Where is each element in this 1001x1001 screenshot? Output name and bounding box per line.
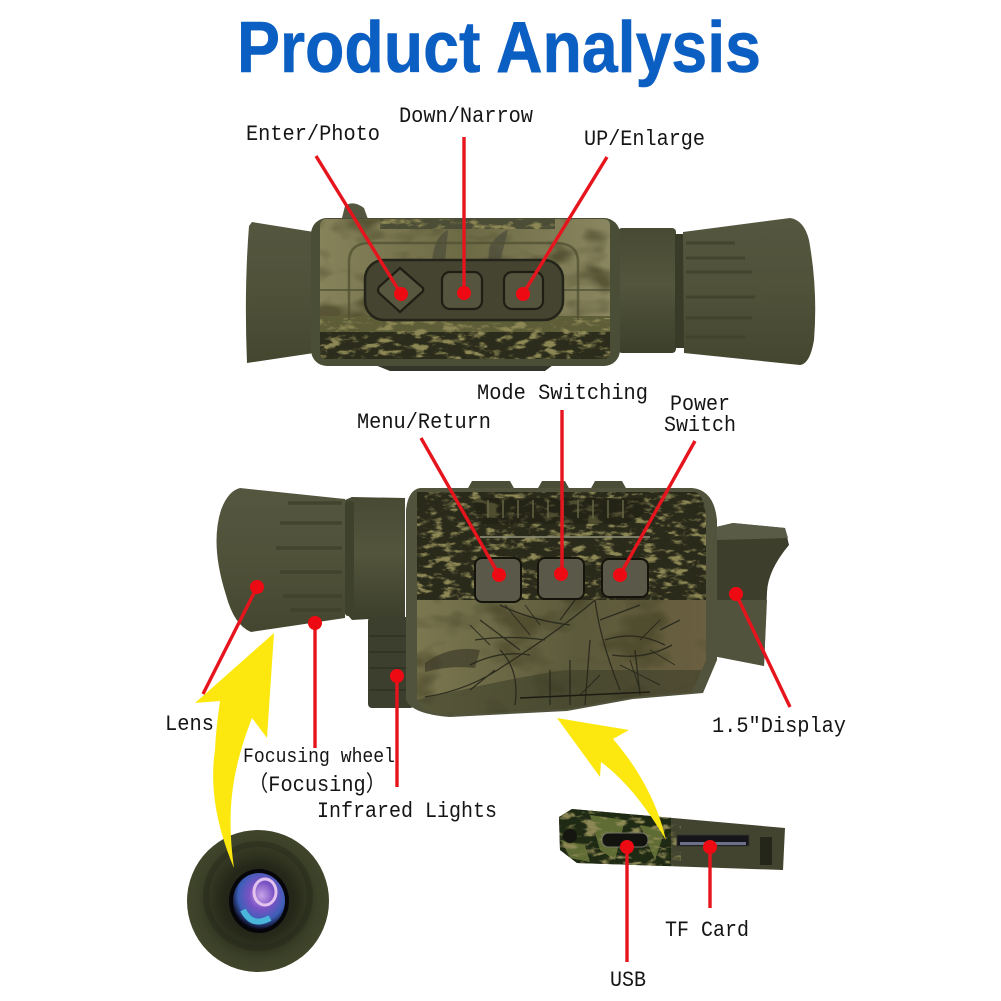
lower tree camo bbox=[417, 600, 707, 718]
mode button bbox=[538, 558, 584, 599]
label: Focusing wheel: Focusing wheel bbox=[243, 746, 395, 769]
eyecup bbox=[187, 830, 329, 972]
focus ring bbox=[618, 228, 676, 353]
label: USB: USB bbox=[610, 968, 646, 993]
label: (Focusing): （Focusing） bbox=[248, 773, 386, 798]
body shell bbox=[406, 488, 717, 717]
label: TF Card: TF Card bbox=[665, 918, 749, 943]
lens ring bbox=[229, 869, 289, 933]
strap lug bbox=[341, 203, 369, 222]
button: enter diamond bbox=[378, 268, 423, 312]
label: Infrared Lights: Infrared Lights bbox=[317, 799, 497, 824]
device: side view monocular bbox=[217, 481, 789, 720]
label: Power Switch: Power bbox=[670, 392, 730, 417]
card slot bbox=[677, 835, 749, 846]
device: front lens view bbox=[187, 830, 329, 972]
highlight stripe bbox=[480, 536, 650, 538]
infrared light housing bbox=[368, 617, 414, 708]
label: Lens: Lens bbox=[165, 712, 214, 737]
objective cup bbox=[683, 218, 815, 365]
lower bark camo bbox=[320, 316, 610, 332]
label: UP/Enlarge: UP/Enlarge bbox=[584, 127, 705, 152]
yellow arrow: ports bbox=[557, 718, 666, 840]
label: 1.5" Display: 1.5"Display bbox=[712, 714, 846, 739]
body shell bbox=[311, 218, 620, 366]
side slot bbox=[760, 837, 772, 865]
button: up bbox=[504, 272, 543, 309]
label: Enter/Photo: Enter/Photo bbox=[246, 122, 380, 147]
bottom slit bbox=[520, 692, 650, 698]
button panel bbox=[365, 260, 563, 320]
top ridge texture bbox=[380, 219, 555, 229]
title: Product Analysis bbox=[237, 8, 761, 88]
callout dots bbox=[250, 286, 743, 854]
grip bumps bbox=[467, 481, 627, 490]
recessed panel outline bbox=[349, 243, 578, 320]
objective cup bbox=[217, 488, 345, 632]
label: Menu/Return: Menu/Return bbox=[357, 410, 491, 435]
menu button bbox=[475, 558, 521, 602]
device: bottom port view bbox=[556, 806, 785, 870]
button: down bbox=[442, 272, 482, 309]
label: Down/Narrow: Down/Narrow bbox=[399, 104, 533, 129]
label: Mode Switching: Mode Switching bbox=[477, 381, 648, 406]
upper bark camo bbox=[417, 490, 707, 601]
upper camo bbox=[320, 219, 610, 319]
callout lines bbox=[203, 137, 790, 962]
display hood bbox=[713, 523, 789, 666]
bottom grip bbox=[375, 352, 553, 371]
yellow arrow: lens bbox=[195, 633, 274, 868]
focus ring bbox=[345, 497, 405, 620]
device: top view monocular bbox=[246, 203, 815, 371]
label: Power Switch: Switch bbox=[664, 413, 736, 438]
power button bbox=[602, 559, 648, 597]
eyecup bbox=[246, 222, 314, 363]
usb port bbox=[602, 833, 648, 847]
lens glass bbox=[233, 873, 285, 929]
top vent grille bbox=[473, 498, 650, 524]
tree branches bbox=[425, 600, 680, 705]
